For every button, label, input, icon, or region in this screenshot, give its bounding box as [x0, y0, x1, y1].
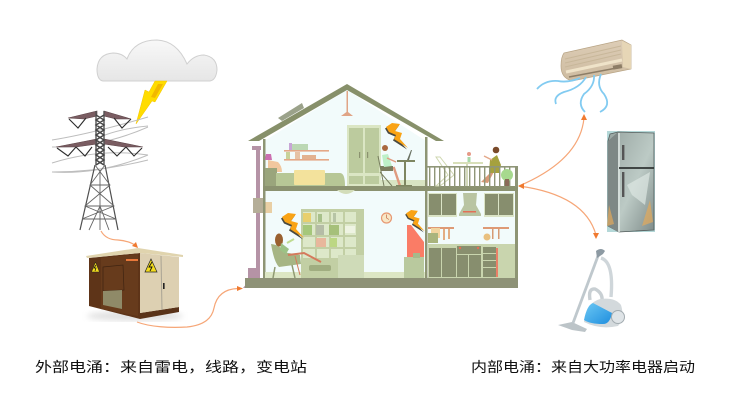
arrow: substation to house	[137, 286, 243, 327]
icon: lightning bolt	[136, 81, 167, 124]
caption: external surge: 外部电涌：来自雷电，线路，变电站	[35, 359, 307, 375]
warning bolt: living room left	[281, 213, 304, 240]
kitchen upper cabinets	[428, 193, 514, 217]
bookcase	[301, 209, 364, 278]
arrow: vacuum link	[518, 183, 599, 239]
arrow: air conditioner link	[519, 114, 587, 186]
wall shelves	[284, 143, 329, 161]
ceiling lamp upstairs	[341, 91, 353, 116]
balcony railing	[427, 166, 518, 187]
drain pipe	[243, 146, 261, 288]
arrow: tower to substation	[101, 231, 138, 248]
sofa	[265, 154, 345, 186]
warning bolt: living room right	[405, 210, 425, 233]
icon: hazard sign left	[92, 262, 100, 272]
ceiling lamp downstairs	[337, 190, 355, 194]
walls and floors	[263, 137, 518, 278]
icon: hazard sign right	[145, 259, 157, 272]
potted plant	[501, 169, 513, 186]
icon: storm cloud	[97, 40, 217, 81]
caption: internal surge: 内部电涌：来自大功率电器启动	[471, 359, 695, 375]
balcony	[427, 147, 518, 187]
red curtain window	[404, 225, 424, 278]
wall basket	[265, 202, 272, 213]
roof	[248, 84, 444, 141]
kitchen lower cabinets	[428, 244, 515, 278]
kitchen interior	[428, 190, 515, 278]
house interior upstairs	[264, 90, 426, 187]
icon: vacuum cleaner	[558, 249, 624, 332]
warning bolt: upstairs	[385, 123, 408, 150]
wardrobe	[347, 125, 381, 186]
icon: air flow streams	[537, 74, 607, 112]
power lines	[52, 117, 148, 172]
icon: substation box	[86, 248, 183, 321]
house interior downstairs	[264, 190, 426, 278]
kitchen utensil racks	[428, 227, 509, 243]
icon: transmission tower	[52, 111, 148, 230]
person at desk	[378, 145, 415, 186]
woman in armchair	[271, 234, 331, 278]
icon: air conditioner	[561, 40, 631, 81]
house illustration	[243, 84, 518, 288]
wall clock	[382, 213, 392, 223]
icon: refrigerator	[607, 131, 655, 232]
